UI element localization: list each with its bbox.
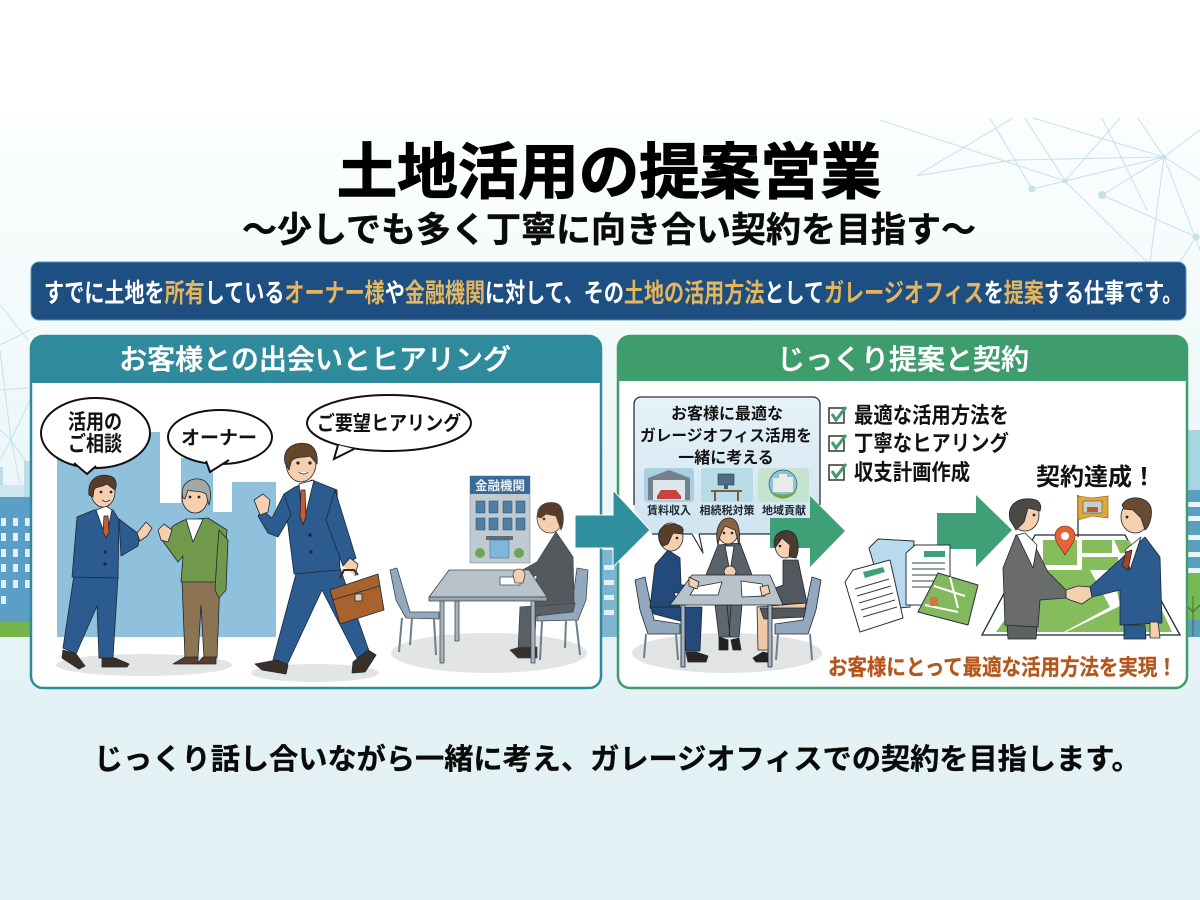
icon: inheritance tax desk: [701, 468, 753, 502]
icon: financial institution building: 金融機関: [475, 478, 525, 493]
subtitle: ～少しでも多く丁寧に向き合い契約を目指す～: [242, 211, 976, 250]
network pattern: left: [0, 305, 30, 484]
arrow: teal between panels: [575, 490, 650, 567]
site map: [982, 535, 1180, 635]
speech bubble: owner: [168, 410, 272, 472]
city backdrop: right: [1186, 430, 1200, 637]
banker: [510, 503, 575, 658]
contract achieved label: 契約達成！: [1036, 464, 1156, 491]
speech bubble: consultation: ご相談: [68, 432, 123, 456]
icon: flag: [1078, 495, 1108, 537]
person: walking salesperson with briefcase: [254, 443, 384, 674]
icon: documents: [845, 539, 978, 632]
closing message in orange: お客様にとって最適な活用方法を実現！: [828, 656, 1177, 680]
briefcase: [330, 570, 384, 624]
panel: proposal and contract: [618, 336, 1187, 688]
panel: meeting and hearing: [31, 336, 601, 688]
proposal callout box: 賃料収入: [647, 503, 691, 517]
handshake: [1066, 586, 1092, 604]
city backdrop: centre gap: [600, 550, 618, 637]
centre woman: [706, 518, 752, 650]
person: land owner: [158, 479, 228, 664]
proposal callout box: [634, 397, 820, 534]
chair right: [537, 568, 588, 621]
network pattern: top right: [880, 118, 1200, 262]
icon: financial institution building: [470, 476, 530, 563]
check item 1: 最適な活用方法を: [854, 404, 1009, 428]
panel header: proposal and contract: [618, 336, 1187, 381]
table: [670, 575, 783, 605]
title: 土地活用の提案営業: [337, 138, 881, 206]
person: salesperson handshake: [1090, 498, 1162, 639]
tail of speech outline: [692, 534, 703, 553]
icon: checklist: [829, 404, 1009, 485]
right woman: [753, 531, 807, 662]
panel header: meeting and hearing: [31, 336, 601, 383]
check item 3: 収支計画作成: [854, 460, 970, 485]
check item 2: 丁寧なヒアリング: [854, 431, 1009, 456]
proposal callout box: お客様に最適な: [671, 404, 783, 423]
proposal callout box: ガレージオフィス活用を: [640, 427, 812, 445]
land map with handshake: [982, 495, 1180, 639]
icon: community contribution: [758, 468, 809, 502]
chair left: [390, 568, 439, 619]
city backdrop: left: [0, 461, 30, 637]
table: [429, 570, 547, 597]
arrow: green to contract: [937, 495, 1012, 567]
intro banner: [31, 262, 1186, 320]
person: salesperson talking: [62, 475, 152, 669]
proposal callout box: 相続税対策: [700, 503, 754, 517]
speech bubble: hearing: ご要望ヒアリング: [317, 411, 461, 435]
chairs: [635, 577, 680, 634]
speech bubble: hearing: [307, 395, 471, 459]
left man: [650, 523, 708, 662]
icon: rental income garage: [644, 468, 694, 502]
footer message: じっくり話し合いながら一緒に考え、ガレージオフィスでの契約を目指します。: [94, 742, 1141, 776]
arrow: green to documents: [770, 496, 845, 567]
proposal callout box: 一緒に考える: [678, 449, 774, 467]
meeting group illustration: [632, 518, 822, 673]
meeting table with banker: [390, 503, 588, 663]
ground shadows: [56, 633, 587, 682]
speech bubble: consultation: 活用の: [68, 411, 122, 434]
person: owner handshake: [1003, 499, 1066, 639]
city skyline illustration: [57, 432, 276, 637]
proposal callout box: 地域貢献: [762, 503, 806, 517]
panel header: proposal and contract: じっくり提案と契約: [777, 344, 1029, 375]
icon: location pin: [1055, 526, 1075, 555]
panel header: meeting and hearing: お客様との出会いとヒアリング: [119, 344, 511, 375]
speech bubble: owner: オーナー: [181, 428, 257, 449]
speech bubble: consultation: [41, 398, 150, 474]
table shadow: [632, 633, 822, 673]
intro banner: すでに土地を所有しているオーナー様や金融機関に対して、その土地の活用方法としてガレージオフィスを提案する仕事です。: [44, 278, 1182, 308]
